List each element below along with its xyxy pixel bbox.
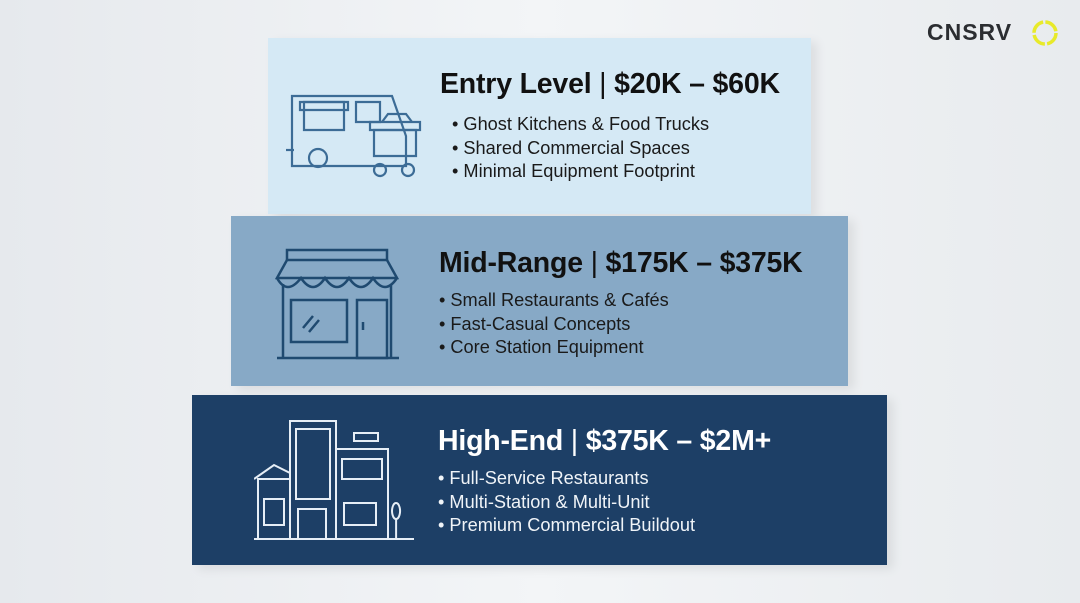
bullets: • Ghost Kitchens & Food Trucks: [452, 114, 709, 134]
heading: Entry Level | $20K – $60K: [440, 68, 780, 100]
bullets: • Minimal Equipment Footprint: [452, 161, 695, 181]
icon: storefront: [275, 248, 399, 360]
bullets: • Premium Commercial Buildout: [438, 515, 695, 535]
bullets: [452, 114, 709, 181]
icon: food truck: [286, 94, 422, 178]
logo: CNSRV: [927, 19, 1012, 45]
logo: [927, 19, 1058, 46]
bullets: • Shared Commercial Spaces: [452, 138, 690, 158]
heading: High-End | $375K – $2M+: [438, 425, 771, 457]
bullets: • Small Restaurants & Cafés: [439, 290, 669, 310]
panel: entry level: [268, 38, 811, 214]
panel: high-end: [192, 395, 887, 565]
panel: mid-range: [231, 216, 848, 386]
bullets: • Core Station Equipment: [439, 337, 644, 357]
icon: building: [254, 420, 414, 540]
bullets: [439, 290, 669, 357]
bullets: • Multi-Station & Multi-Unit: [438, 492, 650, 512]
bullets: • Fast-Casual Concepts: [439, 314, 630, 334]
bullets: [438, 468, 695, 535]
heading: Mid-Range | $175K – $375K: [439, 247, 803, 279]
bullets: • Full-Service Restaurants: [438, 468, 649, 488]
